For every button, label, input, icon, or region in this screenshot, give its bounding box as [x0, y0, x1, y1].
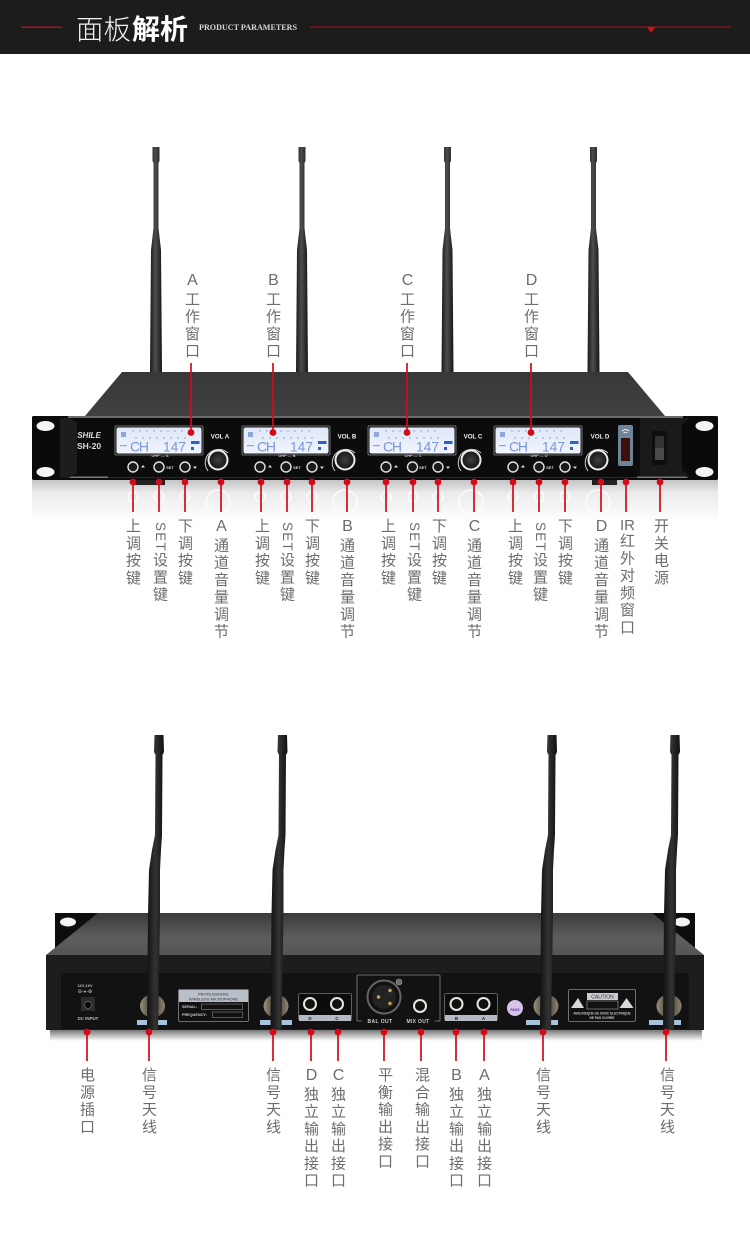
label: C work window: C 工作窗口 [397, 272, 418, 360]
header bar: 解析 [132, 8, 188, 48]
channel C controls: VOL C [464, 434, 483, 440]
label: D up key: 上调按键 [505, 518, 526, 587]
channel C controls [368, 426, 483, 472]
rear antennas [147, 735, 680, 1030]
D and C output jacks: D [308, 1016, 312, 1021]
channel B controls: CH [257, 438, 276, 454]
rear callout lines [84, 1029, 669, 1061]
front unit chassis [32, 372, 718, 480]
channel C controls: SET [419, 465, 427, 470]
label: A up key: 上调按键 [123, 518, 144, 587]
label: B independent output: B 独立输出接口 [446, 1067, 467, 1190]
channel B controls: VOL B [338, 434, 357, 440]
serial number plate: WIRELESS MICROPHONE [189, 996, 238, 1002]
DC power input: ⊖-●-⊕ [78, 989, 92, 994]
label: B channel volume: B 通道音量调节 [337, 518, 358, 641]
channel D controls: UHF — D [530, 453, 548, 458]
channel C controls: 147 [416, 438, 439, 454]
label: B SET key: SET 设置键 [277, 522, 298, 604]
channel B controls: SET [293, 465, 301, 470]
channel D controls: VOL D [591, 434, 610, 440]
label: C independent output: C 独立输出接口 [328, 1067, 349, 1190]
brand logo and model: SH-20 [77, 441, 101, 451]
power rocker switch [652, 431, 667, 465]
caution label [568, 990, 636, 1022]
channel A controls: SET [166, 465, 174, 470]
serial number plate [178, 990, 248, 1022]
channel A controls: CH [130, 438, 149, 454]
channel A controls: 147 [163, 438, 186, 454]
serial number plate: FREQUENCY: [182, 1013, 207, 1017]
label: C channel volume: C 通道音量调节 [464, 518, 485, 641]
channel C controls: UHF — C [404, 453, 422, 458]
header bar [0, 0, 750, 54]
channel C controls: CH [383, 438, 402, 454]
label: antenna 2: 信号天线 [263, 1067, 284, 1136]
purple pass sticker [507, 1000, 523, 1016]
B and A output jacks [444, 994, 498, 1021]
B and A output jacks: A [482, 1016, 486, 1021]
brand logo and model [77, 431, 101, 451]
label: IR window: IR 红外对频窗口 [617, 518, 638, 636]
IR infrared window [618, 425, 633, 466]
label: A independent output: A 独立输出接口 [474, 1067, 495, 1190]
caution label: NE PAS OUVRIR [590, 1016, 615, 1020]
brand logo and model: SHILE [77, 431, 101, 440]
front reflection below the unit [32, 480, 718, 522]
balanced XLR output and mix output: MIX OUT [407, 1019, 429, 1025]
label: B work window: B 工作窗口 [263, 272, 284, 360]
label: A SET key: SET 设置键 [150, 522, 171, 604]
label: antenna 4: 信号天线 [657, 1067, 678, 1136]
channel A controls: UHF — A [151, 453, 169, 458]
label: antenna 1: 信号天线 [139, 1067, 160, 1136]
label: A work window: A 工作窗口 [182, 272, 203, 360]
channel A controls: VOL A [211, 434, 230, 440]
header bar: 面板 [76, 7, 131, 47]
antenna connectors [137, 994, 682, 1025]
label: C up key: 上调按键 [378, 518, 399, 587]
DC power input [77, 983, 99, 1021]
label: C down key: 下调按键 [429, 518, 450, 587]
label: D SET key: SET 设置键 [530, 522, 551, 604]
label: antenna 3: 信号天线 [533, 1067, 554, 1136]
channel B controls: UHF — B [278, 453, 296, 458]
balanced XLR output and mix output: BAL OUT [368, 1019, 392, 1025]
label: C SET key: SET 设置键 [404, 522, 425, 604]
label: B down key: 下调按键 [302, 518, 323, 587]
channel B controls [242, 426, 357, 472]
D and C output jacks: C [335, 1016, 339, 1021]
front callout lines [130, 363, 663, 512]
DC power input: 12V-16V [77, 983, 93, 988]
header bar: PRODUCT PARAMETERS [199, 22, 297, 32]
caution label: CAUTION [591, 994, 614, 1000]
label: power socket: 电源插口 [77, 1067, 98, 1136]
label: power switch: 开关电源 [651, 518, 672, 587]
channel A controls [115, 426, 230, 472]
DC power input: DC INPUT [78, 1016, 99, 1021]
label: D down key: 下调按键 [555, 518, 576, 587]
B and A output jacks: B [455, 1016, 459, 1021]
D and C output jacks [298, 994, 352, 1021]
rear unit chassis [46, 913, 704, 1041]
caution label: AVIS RISQUE DE CHOC ELECTRIQUE [573, 1012, 631, 1016]
channel D controls: SET [546, 465, 554, 470]
label: mix output: 混合输出接口 [412, 1067, 433, 1170]
label: D channel volume: D 通道音量调节 [591, 518, 612, 641]
serial number plate: PROFESSIONAL [198, 992, 230, 996]
label: A down key: 下调按键 [175, 518, 196, 587]
serial number plate: SERIAL: [182, 1005, 197, 1009]
purple pass sticker: PASS [510, 1008, 520, 1012]
label: D independent output: D 独立输出接口 [301, 1067, 322, 1190]
label: B up key: 上调按键 [252, 518, 273, 587]
channel B controls: 147 [290, 438, 313, 454]
front panel antennas [150, 147, 600, 372]
channel D controls: CH [509, 438, 528, 454]
channel D controls [494, 426, 610, 472]
label: balanced output: 平衡输出接口 [375, 1067, 396, 1170]
label: D work window: D 工作窗口 [521, 272, 542, 360]
label: A channel volume: A 通道音量调节 [211, 518, 232, 641]
balanced XLR output and mix output [357, 975, 440, 1025]
channel D controls: 147 [542, 438, 565, 454]
